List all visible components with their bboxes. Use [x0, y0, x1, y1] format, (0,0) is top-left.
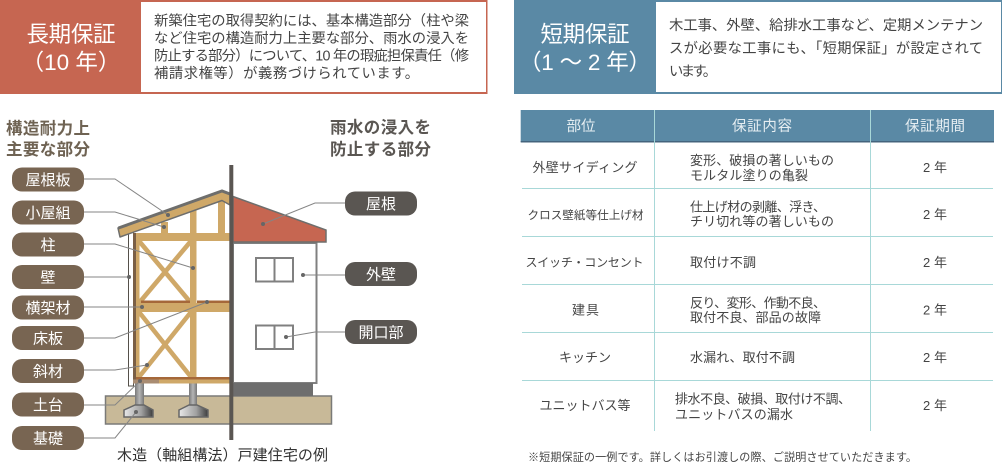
roof: left section	[118, 191, 230, 237]
row: kitchen	[559, 350, 947, 365]
table header: 部位	[566, 118, 596, 135]
row: fittings: 反り、変形、作動不良、	[690, 296, 826, 310]
row: kitchen: 2 年	[923, 350, 947, 365]
label: foundation: 基礎	[33, 430, 63, 447]
label: roof sheathing: 屋根板	[26, 172, 70, 189]
row: wallpaper finish: 2 年	[923, 207, 947, 222]
label: roof	[345, 192, 417, 216]
row: unit bath: 2 年	[923, 398, 947, 413]
row: kitchen: 水漏れ、取付不調	[690, 350, 795, 365]
row: fittings: 取付不良、部品の故障	[690, 310, 821, 325]
label: exterior wall	[345, 262, 417, 286]
heading: rainwater parts: 防止する部分	[330, 140, 432, 159]
row: exterior siding: 2 年	[923, 160, 947, 175]
heading: long-term warranty: （10 年）	[22, 50, 120, 75]
heading: short-term warranty	[519, 22, 651, 75]
exterior siding	[128, 232, 134, 386]
heading: long-term warranty: 長期保証	[26, 22, 116, 47]
label: floorboard	[12, 326, 84, 350]
label: wall: 壁	[40, 269, 56, 286]
row: switches and outlets: 2 年	[923, 255, 947, 270]
table grid	[522, 110, 993, 431]
base	[233, 383, 313, 396]
panel: long-term warranty	[0, 0, 488, 94]
label: foundation	[12, 426, 84, 450]
label: diagonal brace	[12, 359, 84, 383]
row: unit bath: 排水不良、破損、取付け不調、	[675, 392, 851, 406]
row: exterior siding: モルタル塗りの亀裂	[690, 168, 808, 183]
row: wallpaper finish: クロス壁紙等仕上げ材	[528, 208, 644, 222]
row: exterior siding	[532, 153, 947, 183]
ground	[106, 396, 332, 424]
row: fittings: 建具	[572, 302, 599, 318]
row: exterior siding: 変形、破損の著しいもの	[690, 153, 834, 168]
leader lines: rainwater labels	[261, 203, 345, 339]
text block: long-term description: など住宅の構造耐力上主要な部分、雨水の浸入を	[154, 30, 469, 47]
center divider	[229, 165, 233, 440]
heading: long-term warranty	[22, 22, 120, 75]
timber frame	[133, 200, 230, 384]
heading: short-term warranty: 短期保証	[540, 22, 630, 47]
label: openings: 開口部	[358, 324, 404, 341]
heading: rainwater parts	[330, 118, 432, 159]
heading: short-term warranty: （1 ～ 2 年）	[519, 50, 651, 75]
label: roof framing	[12, 200, 84, 224]
table: warranty periods	[521, 110, 994, 431]
leader lines: structural labels	[84, 179, 209, 438]
row: wallpaper finish: 仕上げ材の剥離、浮き、	[690, 200, 826, 214]
label: horizontal member: 横架材	[26, 300, 70, 317]
foundation: right footing	[179, 383, 208, 417]
table header: 保証内容	[732, 118, 792, 135]
label: column	[12, 232, 84, 256]
row: unit bath: ユニットバス等	[540, 398, 630, 413]
text block: long-term description: 新築住宅の取得契約には、基本構造部分（柱や梁	[154, 12, 469, 30]
label: floorboard: 床板	[33, 330, 63, 347]
text block: long-term description: 防止する部分）について、10 年の瑕疵担保責任（修	[154, 48, 470, 64]
table header	[521, 110, 994, 142]
foundation: left footing	[124, 383, 153, 417]
row: unit bath	[540, 392, 947, 422]
right wall	[233, 243, 316, 383]
label: exterior wall: 外壁	[366, 266, 396, 283]
label: roof sheathing	[12, 168, 84, 192]
heading: rainwater parts: 雨水の浸入を	[330, 118, 431, 137]
row: exterior siding: 外壁サイディング	[532, 160, 638, 175]
window: upper	[256, 258, 293, 282]
text block: long-term description	[154, 12, 470, 82]
row: wallpaper finish: チリ切れ等の著しいもの	[690, 214, 834, 229]
label: horizontal member	[12, 296, 84, 320]
roof: red	[233, 196, 326, 242]
panel: short-term warranty	[514, 0, 1002, 94]
row: kitchen: キッチン	[559, 350, 611, 365]
label: roof: 屋根	[366, 196, 396, 213]
label: openings	[345, 320, 417, 344]
row: wallpaper finish	[528, 200, 947, 229]
row: switches and outlets	[526, 255, 947, 270]
heading: structural parts: 構造耐力上	[6, 119, 90, 138]
row: switches and outlets: スイッチ・コンセント	[526, 256, 644, 270]
text block: long-term description: 補請求権等）が義務づけられています。	[154, 64, 419, 82]
row: unit bath: ユニットバスの漏水	[675, 407, 793, 422]
text block: short-term description	[669, 17, 983, 80]
label: column: 柱	[40, 237, 56, 254]
table header: 保証期間	[905, 118, 965, 135]
window: lower	[256, 326, 293, 349]
text block: short-term description: 木工事、外壁、給排水工事など、定期メンテナン	[669, 17, 983, 34]
label: wall	[12, 265, 84, 289]
label: sill: 土台	[33, 397, 63, 414]
diagram: house cross-section	[106, 165, 332, 440]
labels: rainwater parts	[345, 192, 417, 344]
labels: structural parts	[12, 168, 84, 450]
row: fittings: 2 年	[923, 302, 947, 318]
text block: short-term description: スが必要な工事にも、「短期保証」が設定されて	[669, 40, 983, 57]
label: diagonal brace: 斜材	[33, 363, 63, 380]
row: switches and outlets: 取付け不調	[690, 255, 756, 270]
label: roof framing: 小屋組	[26, 205, 70, 222]
row: fittings	[572, 296, 947, 325]
label: sill	[12, 392, 84, 416]
heading: structural parts	[6, 119, 90, 159]
text block: short-term description: います。	[669, 63, 717, 80]
heading: structural parts: 主要な部分	[6, 140, 90, 159]
